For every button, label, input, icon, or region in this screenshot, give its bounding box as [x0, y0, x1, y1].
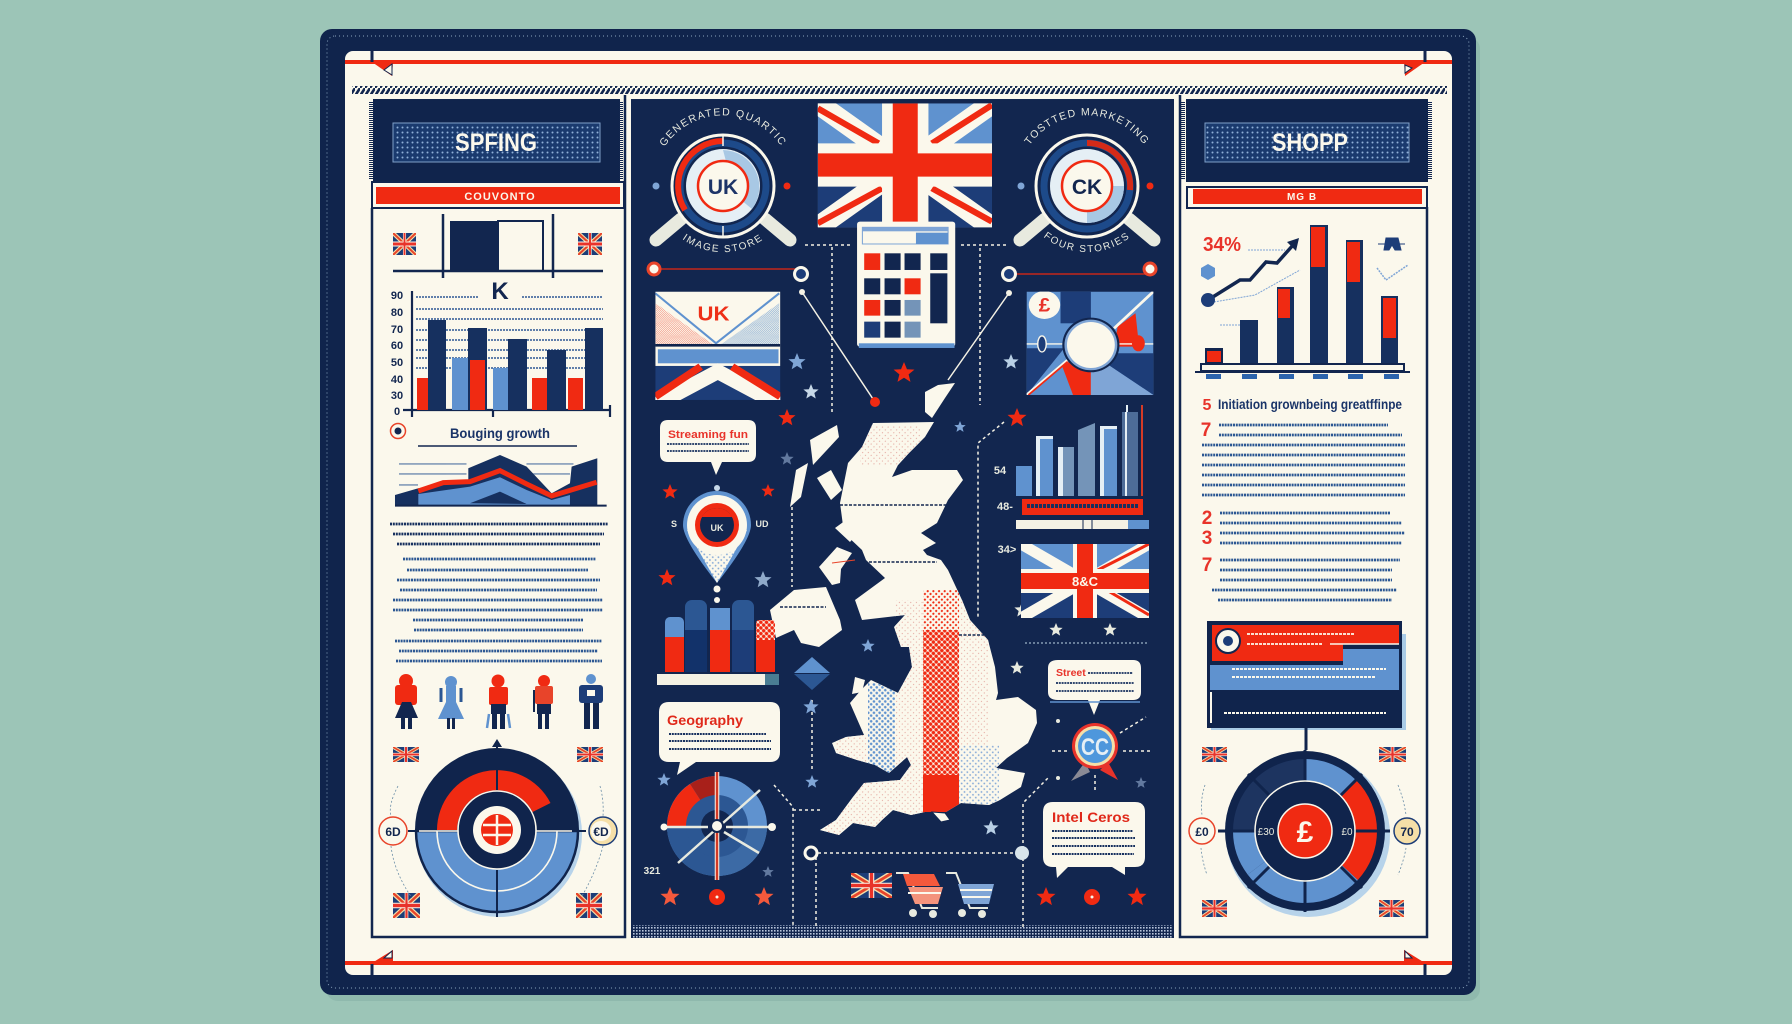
side badge right	[1394, 818, 1420, 844]
connector lines	[648, 245, 1156, 928]
growth heading: Bouging growth	[450, 425, 550, 441]
hatched top strip	[352, 86, 1447, 94]
y axis labels: 60	[391, 340, 403, 352]
envelope UK	[655, 292, 780, 405]
side badge right	[589, 817, 617, 845]
star field	[657, 353, 1147, 905]
flag 8&C	[998, 544, 1149, 643]
location pin: UD	[756, 519, 769, 529]
panel: right shop	[1180, 95, 1430, 937]
side badge left: £0	[1195, 825, 1209, 839]
map square right	[1027, 291, 1153, 395]
y axis labels: 50	[391, 357, 403, 369]
person 3	[487, 674, 510, 729]
callout box	[1207, 621, 1406, 750]
person 1	[395, 674, 418, 729]
speech bubble: geography	[659, 702, 780, 775]
right panel header	[1183, 99, 1430, 182]
y axis labels: 90	[391, 290, 403, 302]
speech bubble: geography: Geography	[667, 712, 743, 728]
magnifier right: CK	[1072, 176, 1102, 199]
side badge left: 6D	[385, 825, 401, 839]
right panel header: SHOPP	[1272, 129, 1348, 157]
y axis labels: 30	[391, 390, 403, 402]
outer frame	[320, 29, 1480, 1001]
y axis labels: 70	[391, 324, 403, 336]
left panel header: SPFING	[455, 129, 537, 157]
heading: 5	[1203, 397, 1212, 414]
corner flags	[1202, 747, 1406, 917]
rosette badge: CC	[1081, 734, 1109, 761]
magnifier right: TOSTTED MARKETING	[1024, 108, 1148, 144]
magnifier right	[1014, 108, 1160, 252]
panel: centre map	[631, 99, 1174, 938]
left panel header	[371, 99, 621, 182]
product bars	[657, 600, 779, 685]
person 2	[438, 676, 464, 729]
speech bubble: street	[1048, 660, 1141, 715]
radar dial: 321	[644, 866, 661, 877]
UK map	[770, 383, 1037, 840]
target dot	[390, 424, 406, 438]
donut chart right	[1201, 750, 1406, 917]
side badge right: 70	[1400, 825, 1414, 839]
panel: left spring	[371, 95, 625, 938]
city bar chart: 48-	[997, 501, 1013, 513]
radar dial	[644, 772, 776, 880]
person 4	[534, 675, 553, 729]
central UK flag	[818, 103, 992, 227]
flag 8&C: 8&C	[1072, 574, 1099, 589]
left red subheading	[372, 182, 624, 208]
donut chart right: £0	[1341, 827, 1353, 838]
location pin: S	[671, 519, 677, 529]
map dashes	[780, 505, 984, 635]
donut chart left	[390, 739, 603, 917]
numbers column: 7	[1201, 420, 1211, 441]
heading: Initiation grownbeing greatffinpe	[1218, 396, 1402, 412]
text block	[390, 524, 608, 661]
side badge right: €D	[593, 825, 609, 839]
magnifier right: FOUR STORIES	[1044, 232, 1128, 252]
bar chart with growth line	[1195, 225, 1410, 379]
islands	[770, 383, 955, 694]
rosette badge	[1056, 719, 1118, 781]
small flags	[393, 233, 602, 255]
speech bubble: streaming fun	[660, 420, 756, 475]
magnifier left	[650, 108, 796, 252]
flag 8&C: 34>	[998, 544, 1016, 556]
shopping cart blue	[946, 873, 994, 918]
mainland	[820, 422, 1037, 835]
y axis labels: 80	[391, 307, 403, 319]
people icons	[395, 674, 603, 729]
right red subheading	[1187, 187, 1427, 208]
triangle marker	[794, 657, 830, 690]
right red subheading: MG B	[1287, 192, 1317, 203]
numbers column	[1201, 420, 1212, 576]
envelope UK: UK	[698, 302, 730, 325]
chart title K: K	[491, 278, 509, 305]
left red subheading: COUVONTO	[464, 191, 536, 203]
person 5	[579, 674, 603, 729]
city bar chart: 54	[994, 465, 1007, 477]
halftone foot	[632, 925, 1173, 938]
y axis labels	[391, 290, 403, 418]
speech bubble: streaming fun: Streaming fun	[668, 429, 748, 441]
magnifier left: UK	[708, 176, 738, 199]
growth arrow	[1201, 238, 1299, 307]
speech bubble: internal	[1043, 802, 1145, 878]
map square right: £	[1039, 295, 1050, 316]
numbers column: 2	[1202, 508, 1212, 529]
magnifier left: IMAGE STORE	[682, 234, 762, 252]
small flag	[851, 873, 892, 898]
donut chart right: £30	[1258, 827, 1275, 838]
text block	[1202, 425, 1405, 600]
y axis labels: 0	[394, 406, 400, 418]
bar chart	[391, 290, 610, 418]
numbers column: 7	[1202, 555, 1212, 576]
location pin	[671, 485, 769, 603]
area chart	[395, 455, 607, 506]
shopping cart red	[896, 873, 943, 918]
y axis labels: 40	[391, 374, 403, 386]
numbers column: 3	[1202, 528, 1212, 549]
side badge left	[379, 817, 407, 845]
donut chart right: £	[1297, 816, 1314, 849]
speech bubble: internal: Intel Ceros	[1052, 809, 1130, 825]
speech bubble: street: Street	[1056, 667, 1086, 679]
bar chart with growth line: 34%	[1203, 234, 1241, 256]
location pin: UK	[710, 523, 724, 533]
black and white block	[393, 214, 603, 278]
top red rule	[345, 51, 1452, 76]
magnifier left: GENERATED QUARTIC	[660, 108, 786, 146]
corner flags	[393, 747, 603, 918]
bottom red rule	[345, 950, 1452, 975]
calculator	[857, 222, 955, 348]
city bar chart	[994, 405, 1149, 529]
side badge left	[1189, 818, 1215, 844]
